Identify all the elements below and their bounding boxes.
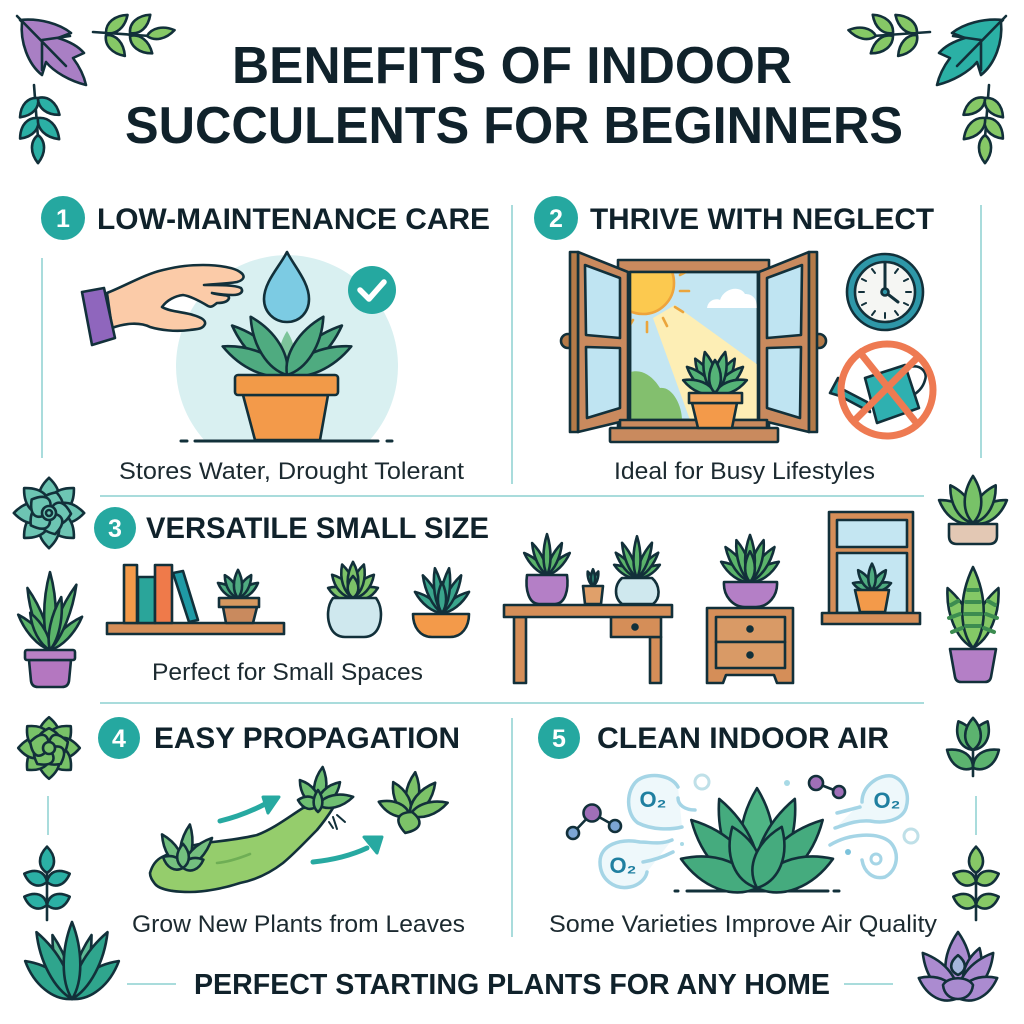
number badge 1: 1 [56,205,70,233]
number badge 3: 3 [108,515,122,543]
panel: versatile small size [94,507,920,686]
panel: easy propagation [98,717,465,938]
heading 4: EASY PROPAGATION [154,722,460,755]
icon: clock [847,254,923,330]
icon: molecules [567,776,845,839]
caption 1: Stores Water, Drought Tolerant [119,458,464,485]
title: SUCCULENTS FOR BEGINNERS [125,97,903,155]
footer text: PERFECT STARTING PLANTS FOR ANY HOME [194,969,830,1001]
arrow: to new plant [313,837,382,862]
number badge 5 [538,717,580,759]
illustration: leaf cutting [150,766,450,892]
arrow: to leaf top [220,797,279,821]
number badge 2: 2 [549,205,563,233]
number badge 3 [94,507,136,549]
number badge 1 [41,196,85,240]
icon: oxygen bubbles: O₂ [640,787,666,812]
number badge 2 [534,196,578,240]
caption 2: Ideal for Busy Lifestyles [614,458,875,485]
panel: thrive with neglect [534,196,934,485]
caption 4: Grow New Plants from Leaves [132,911,465,938]
icon: left side succulents [14,478,125,1007]
illustration: sunny window [561,252,826,442]
icon: right side succulents [914,476,1011,1007]
illustration: desk with plants [504,534,672,683]
heading 2: THRIVE WITH NEGLECT [590,203,934,236]
caption 5: Some Varieties Improve Air Quality [549,911,937,938]
icon: check badge [348,266,396,314]
illustration: hand watering plant [82,252,398,441]
number badge 4: 4 [112,725,126,753]
panel: clean indoor air [538,717,937,938]
title [125,37,903,155]
number badge 4 [98,717,140,759]
icon: no watering can [830,344,933,436]
heading 3: VERSATILE SMALL SIZE [146,512,489,545]
panel: low-maintenance care [41,196,490,485]
illustration: small pots [326,562,472,637]
caption 3: Perfect for Small Spaces [152,659,423,686]
title: BENEFITS OF INDOOR [232,37,792,95]
illustration: nightstand with plant [707,535,793,683]
icon: oxygen bubbles: O₂ [610,853,636,878]
icon: oxygen bubbles [600,775,918,888]
number badge 5: 5 [552,725,566,753]
illustration: small window with plant [822,512,920,624]
illustration: shelf and books [107,565,284,634]
icon: oxygen bubbles: O₂ [874,788,900,813]
icon: top right leaves [847,10,1008,163]
heading 1: LOW-MAINTENANCE CARE [97,203,490,236]
illustration: air-purifying succulent [675,788,839,902]
heading 5: CLEAN INDOOR AIR [597,722,889,755]
icon: top left leaves [15,10,176,163]
